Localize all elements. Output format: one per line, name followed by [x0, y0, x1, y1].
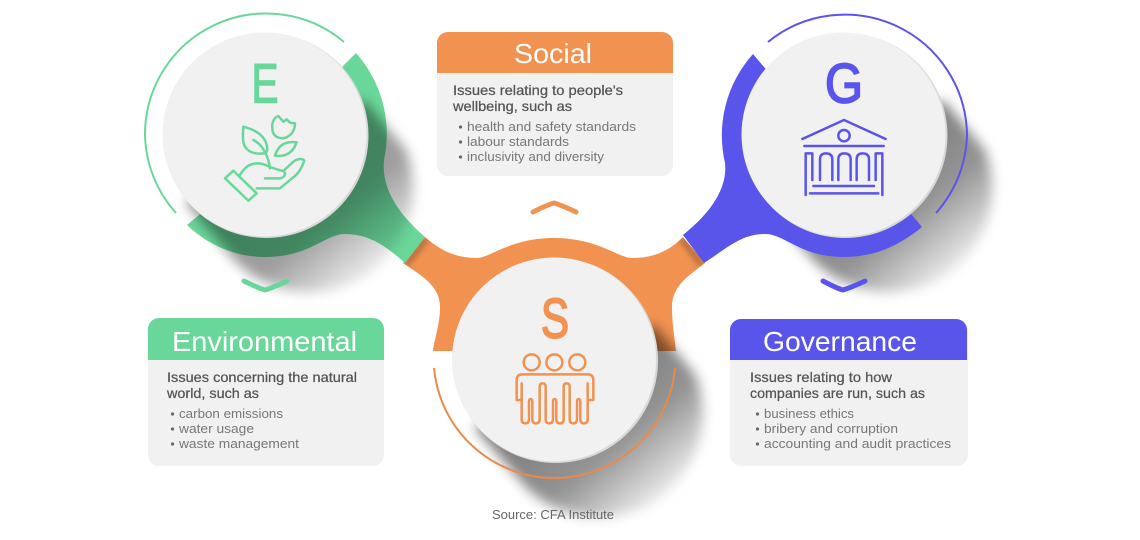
text: environmental description: world, such as — [166, 385, 259, 401]
connector: environmental green band — [187, 53, 425, 263]
arrow: governance chevron — [823, 281, 865, 290]
circle: governance — [742, 32, 948, 238]
icon: institution building — [802, 120, 886, 195]
icon: hand holding plant — [225, 116, 304, 201]
shadow: governance circle — [764, 100, 992, 292]
panel: social — [437, 32, 673, 176]
heading: environmental — [148, 318, 384, 360]
text: environmental description: Issues concerning the natural — [167, 369, 357, 385]
heading: social: Social — [514, 38, 592, 69]
list: environmental issues — [171, 406, 299, 451]
text: governance description — [750, 369, 925, 401]
letter G: G — [825, 52, 863, 114]
list: governance issues: accounting and audit practices — [764, 436, 952, 451]
arrow: social chevron — [533, 203, 576, 212]
text: governance description: companies are run, such as — [750, 385, 925, 401]
circle: environmental — [162, 32, 368, 238]
heading: environmental: Environmental — [172, 326, 357, 357]
heading: governance — [730, 319, 967, 360]
list: social issues: inclusivity and diversity — [467, 149, 605, 164]
list: social issues: health and safety standards — [467, 119, 637, 134]
heading: governance: Governance — [763, 326, 917, 357]
list: governance issues: business ethics — [764, 406, 854, 421]
source note: Source: CFA Institute — [492, 507, 614, 522]
thin arc: governance — [768, 15, 967, 213]
list: environmental issues: water usage — [178, 421, 254, 436]
connector: governance blue band — [683, 54, 922, 263]
text: governance description: Issues relating to how — [750, 369, 893, 385]
arrow: environmental chevron — [244, 281, 287, 290]
heading: social — [437, 32, 673, 73]
thin arc: social — [434, 368, 675, 478]
shadow: environmental circle — [185, 100, 413, 292]
circle: social — [452, 258, 658, 463]
list: social issues — [459, 119, 637, 164]
shadow: social circle — [474, 325, 703, 517]
text: environmental description — [166, 369, 357, 401]
list: environmental issues: waste management — [178, 436, 299, 451]
list: governance issues — [756, 406, 952, 451]
text: social description: Issues relating to people's — [453, 82, 623, 98]
panel: governance — [730, 319, 968, 466]
letter E: E — [252, 52, 278, 114]
list: social issues: labour standards — [467, 134, 570, 149]
text: social description: wellbeing, such as — [452, 98, 572, 114]
icon: group of people — [517, 354, 593, 423]
thin arc: environmental — [145, 14, 344, 213]
list: governance issues: bribery and corruption — [764, 421, 898, 436]
connector: social orange band — [403, 237, 705, 351]
panel: environmental — [148, 318, 384, 466]
text: social description — [452, 82, 623, 114]
list: environmental issues: carbon emissions — [179, 406, 284, 421]
letter S: S — [541, 286, 569, 350]
